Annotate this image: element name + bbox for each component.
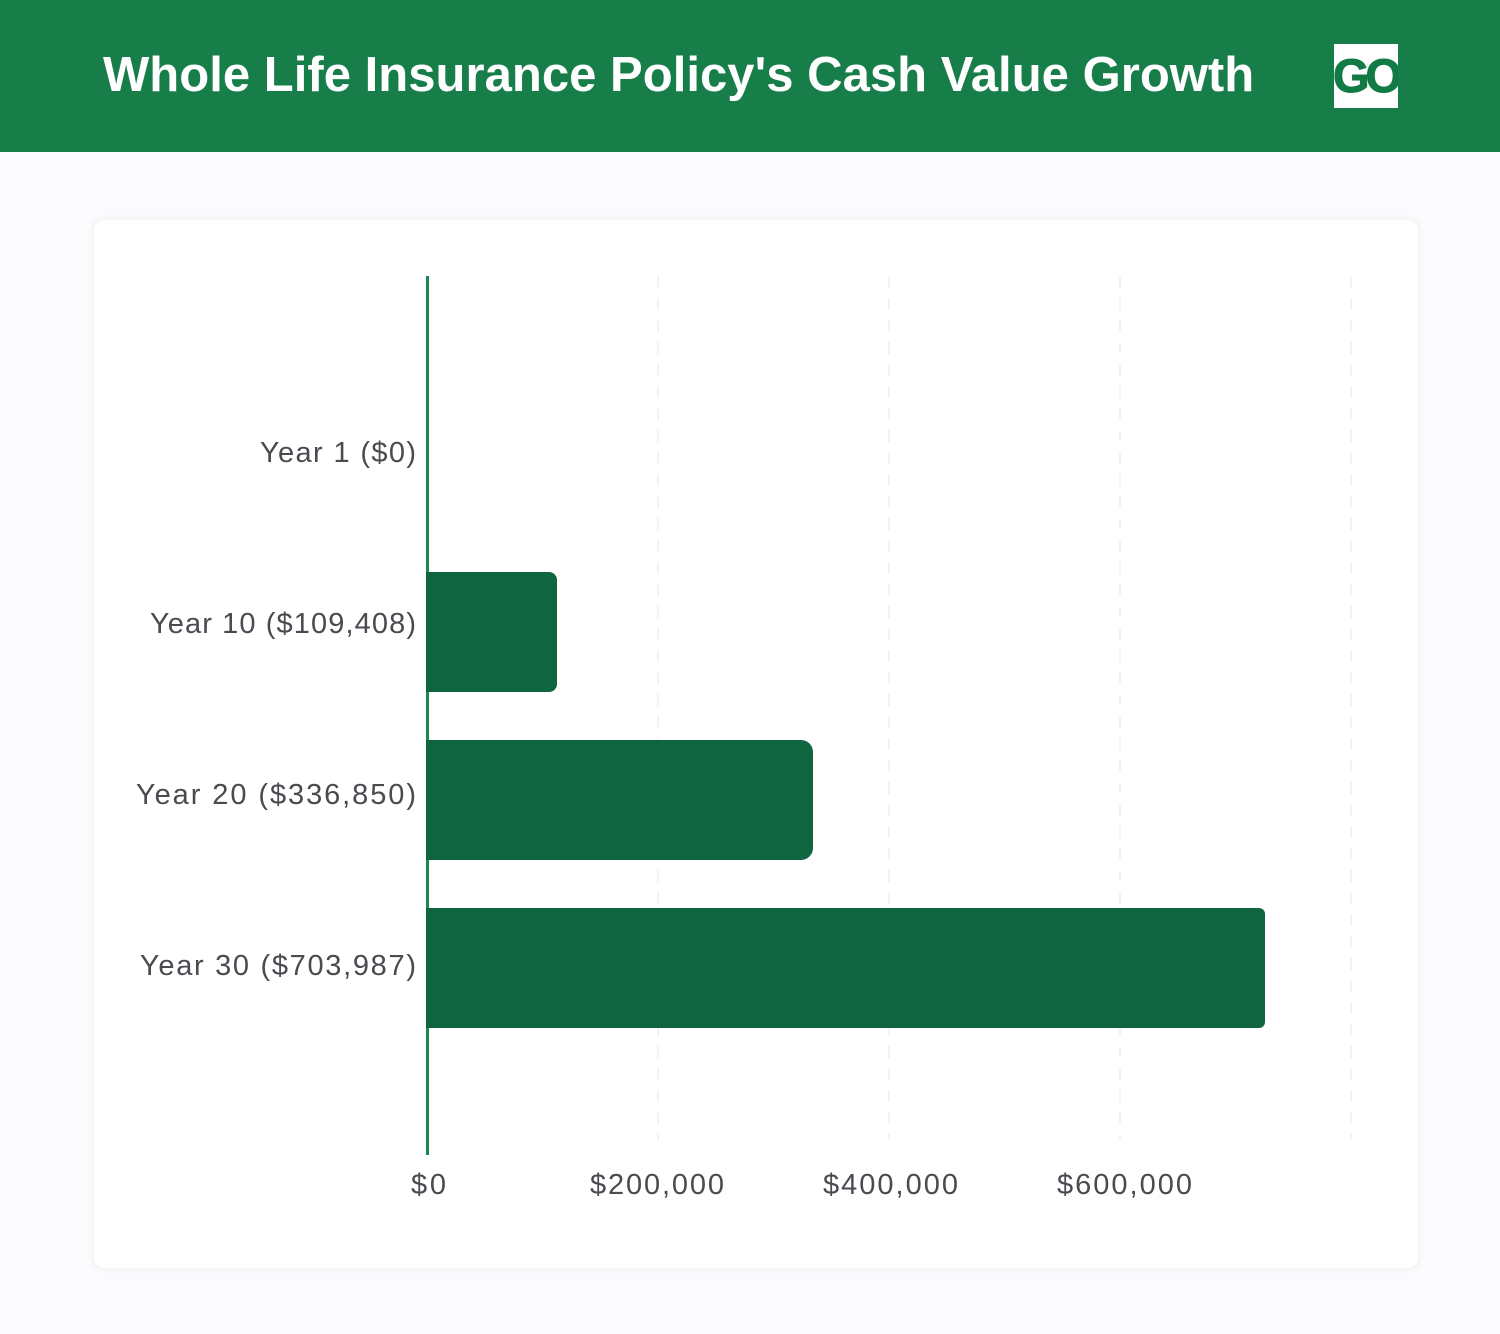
- category labels: Year 20 ($336,850): [136, 779, 416, 811]
- vertical axis: [426, 276, 429, 1155]
- logo: GO: [1334, 49, 1398, 102]
- bar: year 20: [426, 740, 813, 860]
- value axis labels: $0: [411, 1169, 446, 1201]
- bar: year 30: [426, 908, 1265, 1028]
- value axis labels: $200,000: [590, 1169, 724, 1201]
- category labels: Year 30 ($703,987): [140, 950, 416, 982]
- title: Whole Life Insurance Policy's Cash Value Growth: [103, 48, 1254, 102]
- category labels: Year 1 ($0): [260, 437, 416, 469]
- value axis labels: $400,000: [823, 1169, 958, 1201]
- bar: year 10: [426, 572, 557, 692]
- header banner: [0, 0, 1500, 152]
- category labels: [136, 437, 416, 982]
- category labels: Year 10 ($109,408): [150, 608, 416, 640]
- chart panel: [94, 220, 1418, 1268]
- value axis labels: [411, 1169, 1192, 1201]
- value axis labels: $600,000: [1057, 1169, 1192, 1201]
